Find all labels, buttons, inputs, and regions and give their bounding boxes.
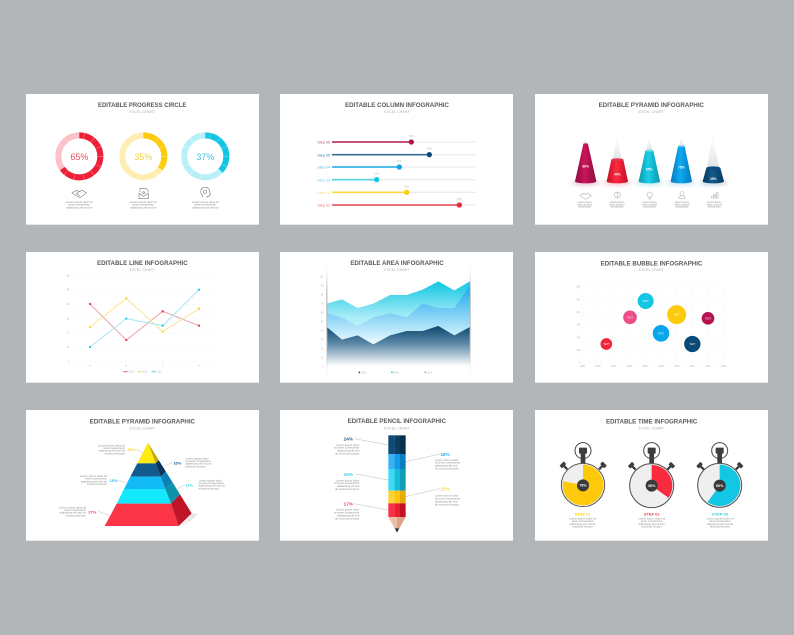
cone: 75%	[671, 137, 692, 183]
subheading: EXCEL CHART	[384, 426, 410, 430]
icon: head with gear	[201, 187, 211, 198]
stopwatch: step 02	[628, 443, 675, 508]
pencil segment: yellow	[388, 491, 406, 503]
donut: 35%: 35%	[134, 152, 152, 162]
bubble: yellow	[667, 305, 686, 324]
text block: cone captions: Lorem ipsum	[707, 201, 722, 204]
callout: 18%: Lorem ipsum dolor	[435, 458, 458, 462]
heading: column: EDITABLE COLUMN INFOGRAPHIC	[345, 103, 450, 109]
text block: cone captions: Lorem ipsum	[610, 201, 624, 204]
callout: 11%: Lorem ipsum dolor	[199, 478, 222, 482]
line chart: 0	[68, 361, 70, 363]
area: bottom series	[327, 326, 470, 367]
heading: area: EDITABLE AREA INFOGRAPHIC	[350, 261, 444, 267]
pyramid shadow	[179, 513, 200, 527]
text block 2	[130, 200, 157, 210]
callout: 15%: 15%	[440, 487, 451, 492]
text block 1: amet consectetur	[68, 203, 90, 207]
callout: 27%: adipiscing elit sed do	[60, 511, 86, 515]
stopwatch: step 01	[559, 443, 607, 507]
callout: 17%: Lorem ipsum dolor	[336, 508, 359, 512]
line chart: D	[198, 366, 200, 368]
panel: column infographic	[280, 94, 513, 225]
bubble chart: 0	[579, 363, 581, 365]
callout: 18%: do eiusmod tempor	[435, 467, 459, 471]
bubble: navy: TEXT	[689, 344, 696, 346]
callout: 15%	[80, 474, 126, 486]
area chart	[319, 265, 471, 377]
slider: step 06	[317, 136, 476, 145]
slider: step 02	[317, 186, 476, 195]
bubble chart: 2010	[674, 366, 680, 368]
subheading: EXCEL CHART	[130, 268, 155, 272]
step 03 label and text: adipiscing elit sed do	[707, 522, 734, 526]
callout: 26%: do eiusmod tempor	[335, 487, 359, 491]
line chart: A	[89, 365, 91, 368]
leader lines	[354, 439, 440, 510]
callout: 16%: adipiscing elit sed do	[185, 462, 212, 466]
area chart: 60	[321, 312, 324, 314]
panel: stopwatches	[535, 410, 768, 541]
layer: blue	[124, 471, 172, 489]
callout: 26%: sit amet consectetur	[334, 481, 359, 485]
line chart: 20	[67, 333, 70, 335]
slider: step 02: 52%	[404, 186, 409, 188]
callout: 17%: adipiscing elit sed	[337, 513, 360, 517]
area chart: 40	[321, 331, 324, 333]
callout: 20%: adipiscing elit sed do	[99, 449, 125, 453]
text block: cone captions: consectetur	[578, 206, 591, 209]
series: cyan	[89, 288, 200, 348]
callout: 16%: Lorem ipsum dolor	[185, 456, 209, 460]
slider: step 03: 31%	[374, 174, 379, 176]
step 03 label and text: STEP 03	[712, 512, 729, 517]
subheading: EXCEL CHART	[384, 268, 410, 272]
slider: step 05: 68%	[427, 149, 432, 151]
text block: cone captions: dolor sit amet	[610, 203, 625, 206]
bubble chart: 500	[576, 299, 581, 301]
cone: 40%	[607, 138, 628, 183]
cone: 25%: 25%	[710, 177, 717, 181]
text block 2: amet consectetur	[132, 203, 154, 207]
text block 1	[66, 200, 93, 210]
stopwatch: step 03	[696, 443, 744, 507]
heading: bubble: EDITABLE BUBBLE INFOGRAPHIC	[601, 262, 703, 268]
slider: step 04	[317, 161, 476, 170]
callout: 27%: Lorem ipsum dolor sit	[59, 505, 86, 509]
bubble chart: 400	[576, 312, 581, 314]
slider: step 04: Step 04	[317, 166, 330, 170]
cone: 75%: 75%	[678, 165, 685, 169]
area chart: 80	[321, 294, 324, 296]
step 03 label and text: eiusmod tempor	[710, 525, 730, 529]
slider: step 01: 89%	[457, 199, 462, 201]
legend: 2019	[394, 372, 400, 374]
text block: cone captions: consectetur	[643, 206, 656, 209]
bubble: yellow: TEXT	[674, 315, 680, 317]
panel: progress circle	[26, 94, 259, 225]
step 02 label and text: STEP 02	[644, 512, 660, 517]
panel: cone pyramid	[535, 94, 768, 225]
callout: 17%: do eiusmod tempor	[335, 516, 359, 520]
text block: cone captions: dolor sit amet	[675, 203, 690, 206]
cone: 65%: 65%	[646, 168, 653, 172]
callout: 24%: Lorem ipsum dolor	[336, 443, 359, 447]
area chart: 10	[321, 358, 324, 360]
slider: step 03: Step 03	[317, 178, 330, 182]
pencil tip	[388, 517, 406, 533]
pencil segment: navy	[388, 435, 406, 454]
donut: 65%	[58, 135, 100, 177]
callout: 26%: adipiscing elit sed	[337, 484, 360, 488]
text block 3: adipiscing elit sed do	[192, 206, 219, 210]
text block: cone captions: dolor sit amet	[577, 203, 592, 206]
bubble: cyan: TEXT	[643, 301, 649, 303]
callout: 17%: sit amet consectetur	[334, 510, 359, 514]
slider: step 06: Step 06	[317, 141, 330, 145]
step 01 label and text: eiusmod tempor	[573, 525, 593, 529]
cone: 80%	[575, 137, 596, 183]
bubble: navy	[684, 336, 700, 352]
callout: 20%: 20%	[127, 447, 136, 452]
subheading: EXCEL CHART	[130, 110, 155, 114]
step 01 label and text: adipiscing elit sed do	[570, 522, 596, 526]
cone: 80%: 80%	[582, 164, 589, 168]
heading: pencil: EDITABLE PENCIL INFOGRAPHIC	[348, 419, 447, 425]
pyramid	[105, 443, 192, 526]
heading: line: EDITABLE LINE INFOGRAPHIC	[97, 261, 188, 267]
stopwatch: step 03: 60%	[716, 484, 724, 488]
callout: 24%: adipiscing elit sed	[337, 449, 360, 453]
bubble chart: 2000	[595, 366, 601, 368]
chart edges	[326, 265, 471, 377]
heading: cone pyramid: EDITABLE PYRAMID INFOGRAPHIC	[599, 103, 705, 109]
callout: 15%: adipiscing elit sed	[435, 499, 458, 503]
bubble: crimson	[702, 312, 714, 325]
legend: 2018	[361, 372, 367, 374]
line chart	[67, 275, 218, 374]
callout: 11%: eiusmod tempor	[199, 486, 219, 490]
slider: step 06: 60%	[409, 136, 414, 138]
area chart: 50	[321, 321, 324, 323]
bubble: blue	[653, 325, 669, 342]
callout: 20%: Lorem ipsum dolor sit	[98, 444, 125, 448]
bubble chart: 100	[576, 350, 581, 352]
slider: step 02: Step 02	[317, 191, 330, 195]
text block 2: Lorem ipsum dolor sit	[130, 200, 157, 204]
bubble chart: 600	[576, 287, 581, 289]
callout: 11%: adipiscing elit sed do	[199, 484, 225, 488]
callout: 16%: eiusmod tempor	[185, 464, 206, 468]
line chart: 60	[67, 275, 70, 277]
line chart: 40	[67, 304, 70, 306]
step 02 label and text: adipiscing elit sed do	[639, 522, 665, 526]
text block: cone captions: Lorem ipsum	[675, 201, 689, 204]
heading: progress circle: EDITABLE PROGRESS CIRCLE	[98, 103, 186, 109]
callout: 24%: do eiusmod tempor	[335, 452, 359, 456]
area: top series	[327, 281, 470, 367]
legend: 2018	[128, 372, 134, 374]
series: yellow	[89, 297, 200, 333]
step 03 label and text: amet consectetur	[709, 519, 731, 523]
callout: 26%: Lorem ipsum dolor	[336, 478, 359, 482]
callout: 18%: sit amet consectetur	[435, 461, 460, 465]
pencil segment: red	[388, 503, 406, 517]
legend	[358, 371, 433, 374]
subheading: EXCEL CHART	[130, 427, 155, 431]
bubble: blue: TEXT	[658, 333, 665, 335]
callout: 20%	[98, 444, 143, 455]
area chart: 0	[322, 367, 324, 369]
text block: cone captions: consectetur	[708, 206, 721, 209]
text block 3: amet consectetur	[194, 203, 216, 207]
donut: 65%: 65%	[70, 152, 88, 162]
callout: 16%: sit amet consectetur	[185, 459, 211, 463]
callout: 16%: 16%	[173, 460, 182, 465]
callout: 15%: adipiscing elit sed do	[81, 479, 107, 483]
text block 3	[192, 200, 219, 210]
cone shadows	[571, 180, 728, 185]
area chart: 100	[319, 276, 324, 278]
callout: 24%: 24%	[344, 437, 354, 442]
callout: 15%: do eiusmod tempor	[435, 502, 459, 506]
bubble: cyan	[638, 293, 654, 309]
callout: 24%	[334, 437, 360, 456]
pencil segment: cyan	[388, 469, 406, 491]
callout: 26%	[334, 472, 360, 491]
pencil	[388, 435, 406, 533]
panel: layered pyramid	[26, 410, 259, 541]
step 03 label and text: Lorem ipsum dolor sit	[706, 516, 734, 520]
callout: 18%: adipiscing elit sed	[435, 464, 458, 468]
text block: cone captions: dolor sit amet	[642, 203, 657, 206]
legend: 2020	[427, 372, 433, 374]
text block: cone captions: consectetur	[611, 206, 624, 209]
bubble chart: 2006	[642, 366, 648, 368]
donut: 37%: 37%	[196, 152, 214, 162]
bubble chart: 300	[576, 325, 581, 327]
bubble: crimson: TEXT	[705, 318, 712, 320]
text block: cone captions: consectetur	[676, 206, 689, 209]
bubble: pink: TEXT	[627, 317, 634, 319]
step 01 label and text: STEP 01	[575, 512, 591, 517]
icon: envelope	[139, 188, 148, 199]
text block 3: Lorem ipsum dolor sit	[192, 200, 219, 204]
slider: step 05	[317, 149, 476, 157]
bubble chart: 2016	[721, 366, 727, 368]
bubble chart: 2014	[705, 366, 711, 368]
callout: 11%	[178, 478, 225, 490]
layer: navy	[130, 460, 166, 477]
stopwatch: step 01: 78%	[579, 484, 587, 488]
callout: 24%: sit amet consectetur	[334, 446, 359, 450]
callout: 27%: eiusmod tempor	[66, 513, 86, 517]
callout: 15%: amet consectetur	[85, 477, 107, 481]
area: middle series	[327, 285, 470, 367]
text block: cone captions: dolor sit amet	[707, 203, 722, 206]
callout: 15%: Lorem ipsum dolor sit	[80, 474, 107, 478]
callout: 27%: amet consectetur	[64, 508, 86, 512]
subheading: EXCEL CHART	[384, 110, 410, 114]
bubble chart: 2004	[627, 366, 633, 368]
callout: 11%: sit amet consectetur	[199, 481, 224, 485]
line chart: 50	[67, 290, 70, 292]
callout: 26%: 26%	[344, 472, 354, 477]
stopwatch: step 02: 35%	[648, 484, 656, 488]
icons row	[580, 192, 718, 199]
slider: step 01: Step 01	[317, 204, 330, 208]
text block: cone captions	[577, 201, 722, 209]
step 02 label and text: amet consectetur	[641, 519, 663, 523]
area chart: 70	[321, 303, 324, 305]
text block: cone captions: Lorem ipsum	[577, 201, 592, 204]
callout: 11%: 11%	[185, 483, 194, 488]
callout: 27%	[59, 505, 109, 517]
cone: 65%	[639, 137, 660, 183]
layer: yellow	[137, 443, 159, 463]
bubble chart	[576, 287, 727, 368]
step 02 label and text: eiusmod tempor	[642, 525, 662, 529]
series: red	[89, 303, 200, 341]
callout: 27%: 27%	[88, 509, 97, 514]
text block 2: adipiscing elit sed do	[130, 206, 157, 210]
panel: bubble chart	[535, 252, 768, 383]
callout: 16%	[165, 456, 212, 468]
step 01 label and text: amet consectetur	[572, 519, 594, 523]
callout: 18%: 18%	[440, 452, 451, 457]
donut: 37%	[184, 135, 226, 177]
callout: 15%: 15%	[110, 478, 118, 483]
bubble chart: 1998	[580, 366, 586, 368]
layer: red	[105, 494, 192, 526]
bubble chart: 2012	[690, 366, 696, 368]
cone: 25%	[703, 137, 724, 183]
icon: handshake	[72, 190, 86, 198]
slider: step 05: Step 05	[317, 153, 330, 157]
subheading: EXCEL CHART	[639, 110, 664, 114]
text block 1: Lorem ipsum dolor sit	[66, 200, 93, 204]
panel: line chart	[26, 252, 259, 383]
callout: 18%	[435, 452, 460, 471]
layer: cyan	[117, 482, 180, 504]
bubble chart: 200	[576, 337, 581, 339]
area chart: 30	[321, 340, 324, 342]
callout: 20%: eiusmod tempor	[105, 451, 125, 455]
bubble: red: TEXT	[603, 344, 610, 346]
line chart: 10	[67, 347, 70, 349]
pencil segment: blue	[388, 454, 406, 469]
bubble chart: 2002	[611, 366, 617, 368]
bubble: pink	[623, 310, 637, 324]
legend	[123, 372, 163, 374]
step 01 label and text: Lorem ipsum dolor sit	[569, 516, 596, 520]
step 03 label and text	[706, 512, 734, 529]
text block: cone captions: Lorem ipsum	[642, 201, 657, 204]
legend: 2020	[157, 372, 163, 374]
subheading: EXCEL CHART	[639, 268, 664, 272]
text block 1: adipiscing elit sed do	[66, 206, 93, 210]
line chart: C	[162, 366, 164, 368]
callout: 15%	[435, 487, 460, 506]
callout: 15%: eiusmod tempor	[87, 482, 107, 486]
line chart: B	[126, 366, 128, 368]
heading: time: EDITABLE TIME INFOGRAPHIC	[606, 420, 698, 426]
step 02 label and text	[638, 512, 665, 529]
bubble chart: 2008	[658, 366, 664, 368]
panel: pencil	[280, 410, 513, 541]
slider: step 04: 47%	[397, 161, 402, 163]
subheading: EXCEL CHART	[639, 426, 664, 430]
area chart: 90	[321, 285, 324, 287]
callout: 20%: amet consectetur	[103, 446, 125, 450]
panel: area chart	[280, 252, 513, 383]
area chart: 20	[321, 349, 324, 351]
cone: 40%: 40%	[614, 172, 621, 176]
slider: step 01	[317, 199, 476, 208]
slider: step 03	[317, 174, 476, 182]
heading: pyramid: EDITABLE PYRAMID INFOGRAPHIC	[90, 420, 196, 426]
step 01 label and text	[569, 512, 596, 529]
step 02 label and text: Lorem ipsum dolor sit	[638, 516, 665, 520]
callout: 17%: 17%	[344, 502, 354, 507]
callout: 17%	[334, 502, 360, 520]
callout: 15%: Lorem ipsum dolor	[435, 494, 458, 498]
donut: 35%	[122, 135, 164, 177]
callout: 15%: sit amet consectetur	[435, 496, 460, 500]
legend: 2019	[142, 372, 148, 374]
bubble: red	[600, 338, 612, 350]
line chart: 30	[67, 318, 70, 320]
